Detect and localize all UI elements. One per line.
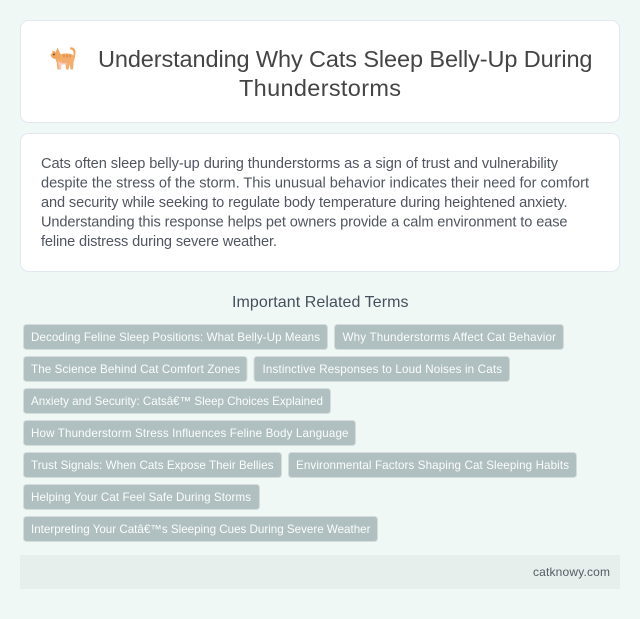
tags: related terms: The Science Behind Cat Comfort Zones xyxy=(31,363,240,376)
title: Understanding Why Cats Sleep Belly-Up During xyxy=(98,46,592,72)
tags: related terms: Trust Signals: When Cats Expose Their Bellies xyxy=(31,459,274,472)
text block: summary paragraph: Understanding this response helps pet owners provide a calm environment to ease xyxy=(41,214,568,230)
tags: related terms: Instinctive Responses to Loud Noises in Cats xyxy=(262,363,502,376)
tags: related terms: Interpreting Your Catâ€™s Sleeping Cues During Severe Weather xyxy=(31,523,371,536)
text block: summary paragraph: and security while seeking to regulate body temperature during heightened anxiety. xyxy=(41,195,568,211)
text block: summary paragraph: despite the stress of the storm. This unusual behavior indicates their need for comfort xyxy=(41,176,589,192)
tags: related terms: Environmental Factors Shaping Cat Sleeping Habits xyxy=(296,459,569,472)
panel: summary xyxy=(20,134,620,272)
icon: cat xyxy=(51,47,76,70)
footer: catknowy.com xyxy=(533,565,610,579)
tags: related terms: Helping Your Cat Feel Safe During Storms xyxy=(31,491,251,504)
tags: related terms: How Thunderstorm Stress Influences Feline Body Language xyxy=(31,427,348,440)
heading: related terms: Important Related Terms xyxy=(232,294,408,311)
tags: related terms xyxy=(24,324,576,542)
tags: related terms: Decoding Feline Sleep Positions: What Belly-Up Means xyxy=(31,331,320,344)
tags: related terms: Why Thunderstorms Affect Cat Behavior xyxy=(342,331,556,344)
panel: title card xyxy=(20,20,620,122)
text block: summary paragraph: Cats often sleep belly-up during thunderstorms as a sign of trust and vulnerability xyxy=(41,156,559,172)
title xyxy=(98,46,592,101)
tags: related terms: Anxiety and Security: Catsâ€™ Sleep Choices Explained xyxy=(31,395,323,408)
text block: summary paragraph xyxy=(41,156,589,250)
title: Thunderstorms xyxy=(239,75,401,101)
footer xyxy=(20,555,620,589)
text block: summary paragraph: feline distress during severe weather. xyxy=(41,234,277,250)
